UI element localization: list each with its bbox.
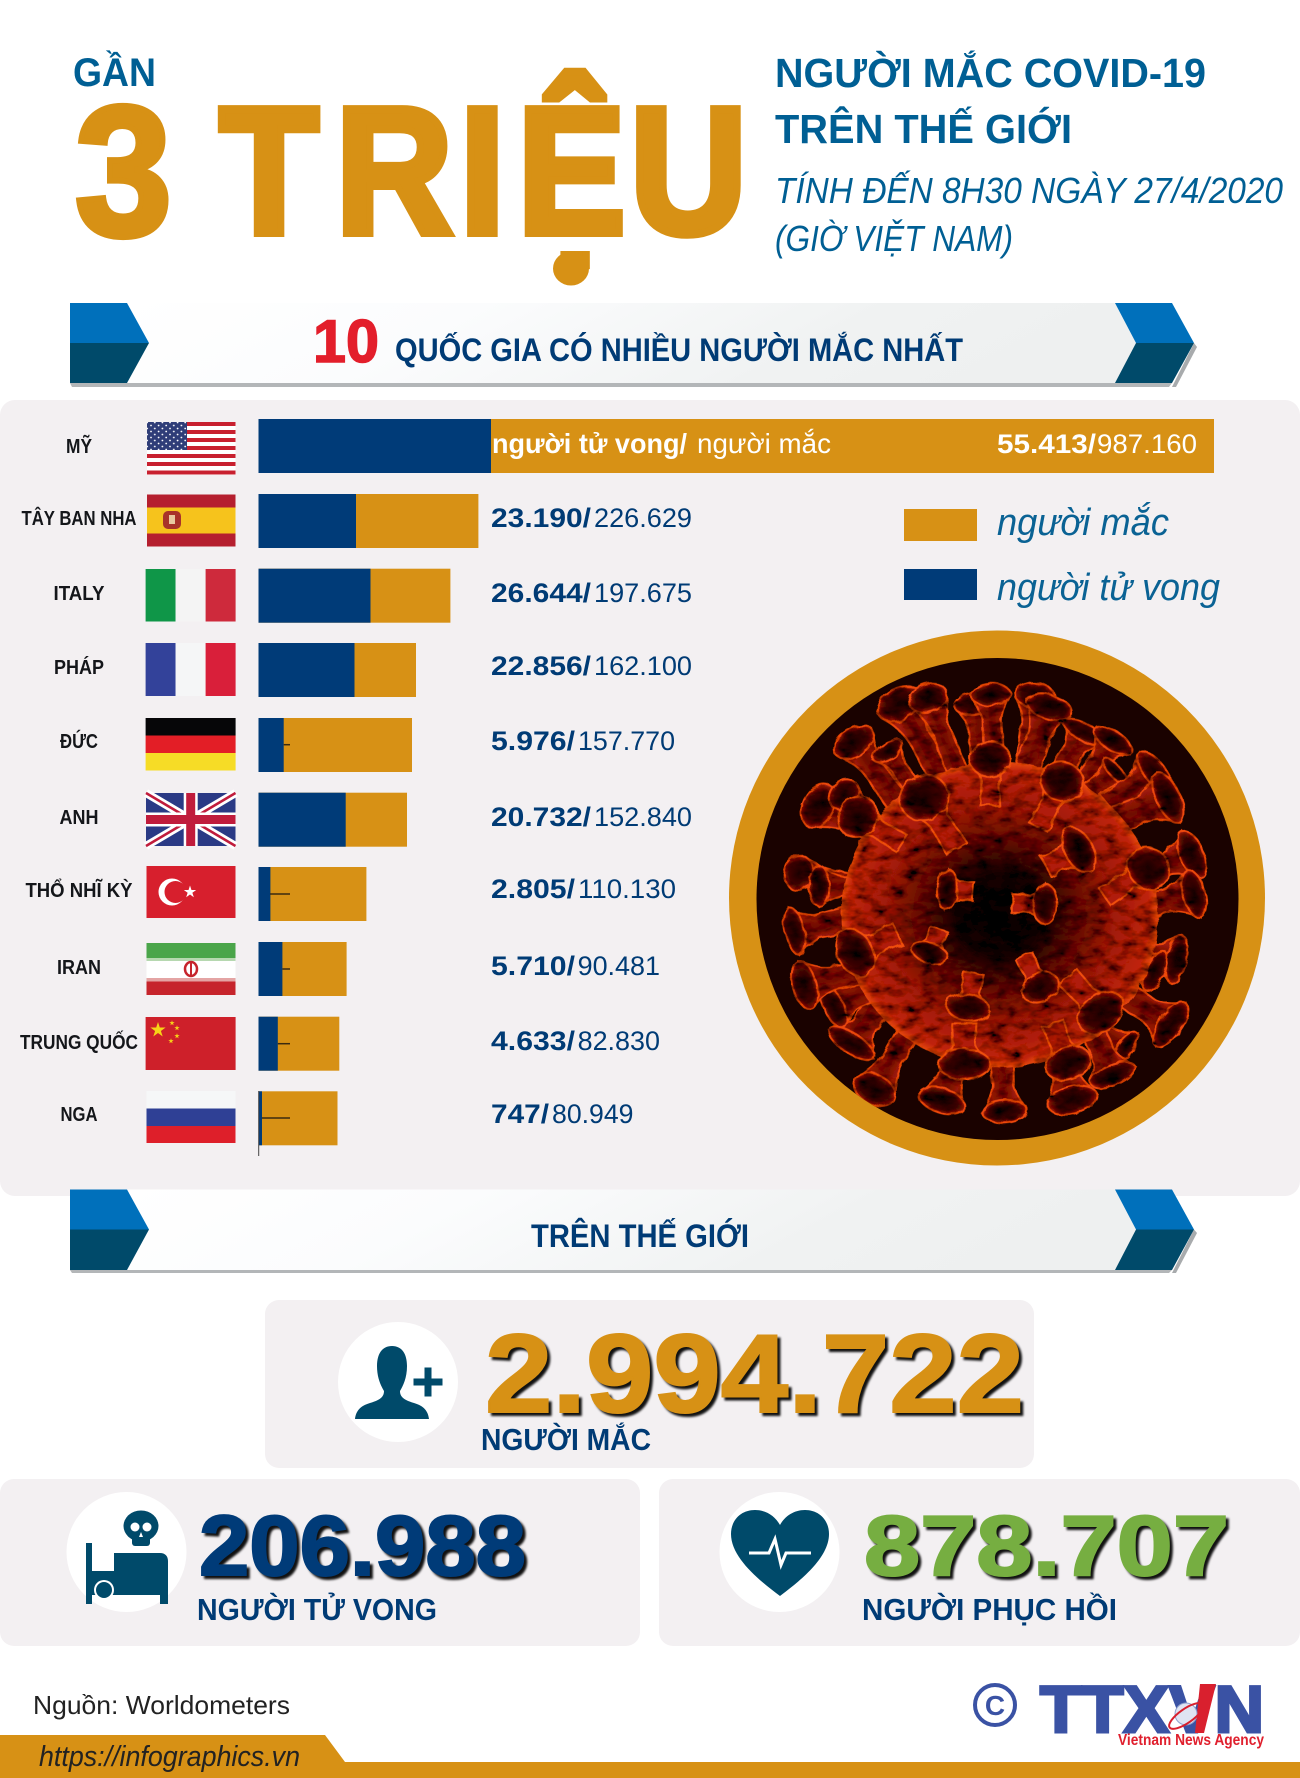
row: Trung Quốc: TRUNG QUỐC — [20, 1030, 138, 1054]
values: Tây Ban Nha: 23.190/ — [491, 503, 592, 533]
row: Italy — [54, 569, 692, 623]
values: Đức: 157.770 — [578, 726, 675, 756]
values: Thổ Nhĩ Kỳ: 2.805/ — [491, 874, 576, 904]
flag: USA — [147, 422, 236, 475]
panel: deaths: 206.988 — [199, 1499, 526, 1594]
bar caption and value: Mỹ: 987.160 — [1097, 429, 1197, 459]
icon: person plus — [338, 1322, 458, 1442]
row: Anh: ANH — [60, 807, 98, 829]
values: Trung Quốc — [491, 1026, 660, 1056]
values: Đức — [491, 726, 675, 756]
legend: người tử vong — [997, 567, 1220, 609]
flag: Russia — [146, 1091, 236, 1143]
bar caption and value: Mỹ: người mắc — [697, 428, 831, 459]
values: Thổ Nhĩ Kỳ: 110.130 — [578, 874, 676, 904]
flag: Spain — [147, 494, 236, 546]
row: Nga — [60, 1091, 634, 1156]
panel: recovered — [659, 1479, 1300, 1646]
bar: Italy — [258, 569, 450, 623]
title: gần 3 triệu: TRIỆU — [220, 71, 747, 272]
panel: deaths: NGƯỜI TỬ VONG — [197, 1591, 437, 1627]
panel: recovered: NGƯỜI PHỤC HỒI — [862, 1591, 1117, 1627]
row: Đức: ĐỨC — [60, 729, 98, 753]
logo: TTXVN: Vietnam News Agency — [1118, 1732, 1264, 1749]
row: Pháp — [54, 643, 692, 697]
values: Italy — [491, 578, 692, 608]
icon: heart with pulse — [720, 1492, 840, 1612]
row: Mỹ — [66, 419, 1214, 475]
bar: Trung Quốc — [258, 1017, 339, 1071]
bar: Mỹ — [258, 419, 1214, 473]
logo: TTXVN: TTXVN — [1040, 1672, 1264, 1746]
bar: Thổ Nhĩ Kỳ — [258, 867, 366, 921]
values: Iran: 5.710/ — [491, 951, 576, 981]
bar: Nga — [258, 1091, 338, 1156]
row: Tây Ban Nha: TÂY BAN NHA — [22, 506, 136, 530]
bar: Iran — [258, 942, 347, 996]
values: Iran: 90.481 — [578, 951, 660, 981]
values: Pháp: 22.856/ — [491, 651, 592, 681]
logo: TTXVN: C — [985, 1690, 1005, 1721]
values: Nga: 747/ — [491, 1099, 550, 1129]
bar caption and value: Mỹ: người tử vong/ — [492, 428, 687, 459]
banner: 10 countries: QUỐC GIA CÓ NHIỀU NGƯỜI MẮC NHẤT — [395, 332, 963, 368]
banner: worldwide — [70, 1190, 1197, 1273]
row: Tây Ban Nha — [22, 494, 692, 548]
legend: người mắc — [997, 501, 1169, 544]
icon: skull over bed — [66, 1492, 186, 1612]
values: Anh — [491, 802, 692, 832]
row: Thổ Nhĩ Kỳ — [26, 866, 676, 921]
bar: Pháp — [258, 643, 416, 697]
bar: Tây Ban Nha — [258, 494, 478, 548]
values: Nga — [491, 1099, 634, 1129]
row: Đức — [60, 718, 675, 772]
icon: coronavirus in gold ring — [729, 630, 1265, 1166]
row: Trung Quốc — [20, 1017, 660, 1071]
row: Thổ Nhĩ Kỳ: THỔ NHĨ KỲ — [26, 878, 133, 902]
panel: deaths — [0, 1479, 640, 1646]
values: Italy: 197.675 — [594, 578, 692, 608]
flag: China — [146, 1017, 236, 1070]
flag: Germany — [146, 718, 236, 770]
row: Iran — [57, 942, 660, 996]
values: Tây Ban Nha — [491, 503, 692, 533]
values: Iran — [491, 951, 660, 981]
bar: Anh — [258, 793, 407, 847]
source text: Nguồn: Worldometers — [33, 1690, 290, 1720]
title: gần 3 triệu: GẦN — [73, 49, 156, 95]
title: gần 3 triệu: 3 — [75, 69, 172, 275]
flag: France — [146, 643, 236, 696]
flag: Italy — [146, 569, 236, 622]
banner: 10 countries — [70, 303, 1197, 387]
flag: Turkey — [146, 866, 236, 918]
values: Italy: 26.644/ — [491, 578, 592, 608]
row: Anh — [60, 793, 692, 847]
panel: confirmed cases: NGƯỜI MẮC — [481, 1421, 651, 1457]
panel: top 10 countries — [0, 400, 1300, 1196]
values: Tây Ban Nha: 226.629 — [594, 503, 692, 533]
title: gần 3 triệu — [73, 49, 747, 286]
values: Đức: 5.976/ — [491, 726, 576, 756]
values: Anh: 152.840 — [594, 802, 692, 832]
values: Anh: 20.732/ — [491, 802, 592, 832]
values: Nga: 80.949 — [552, 1099, 634, 1129]
row: Mỹ: MỸ — [66, 435, 93, 458]
banner: worldwide: TRÊN THẾ GIỚI — [531, 1218, 749, 1254]
footer bar — [0, 1735, 1300, 1778]
values: Trung Quốc: 82.830 — [578, 1026, 660, 1056]
values: Thổ Nhĩ Kỳ — [491, 874, 676, 904]
row: Pháp: PHÁP — [54, 656, 104, 679]
bar caption and value: Mỹ — [492, 428, 1197, 459]
subtitle: NGƯỜI MẮC COVID-19 — [775, 50, 1206, 96]
subtitle: TRÊN THẾ GIỚI — [775, 106, 1072, 152]
values: Trung Quốc: 4.633/ — [491, 1026, 576, 1056]
banner: 10 countries: 10 — [313, 308, 379, 375]
row: Italy: ITALY — [54, 583, 105, 605]
legend — [904, 501, 1220, 609]
values: Pháp: 162.100 — [594, 651, 692, 681]
row: Iran: IRAN — [57, 957, 101, 979]
panel: confirmed cases: 2.994.722 — [485, 1312, 1024, 1436]
values: Pháp — [491, 651, 692, 681]
subtitle: (GIỜ VIỆT NAM) — [775, 218, 1013, 259]
flag: Iran — [146, 943, 236, 995]
row: Nga: NGA — [60, 1104, 98, 1126]
panel: recovered: 878.707 — [864, 1499, 1229, 1594]
bar caption and value: Mỹ: 55.413/ — [997, 429, 1097, 459]
panel: confirmed cases — [265, 1300, 1034, 1468]
footer url: https://infographics.vn — [39, 1741, 300, 1773]
bar: Đức — [258, 718, 412, 772]
flag: UK — [146, 793, 236, 846]
subtitle — [775, 50, 1283, 259]
